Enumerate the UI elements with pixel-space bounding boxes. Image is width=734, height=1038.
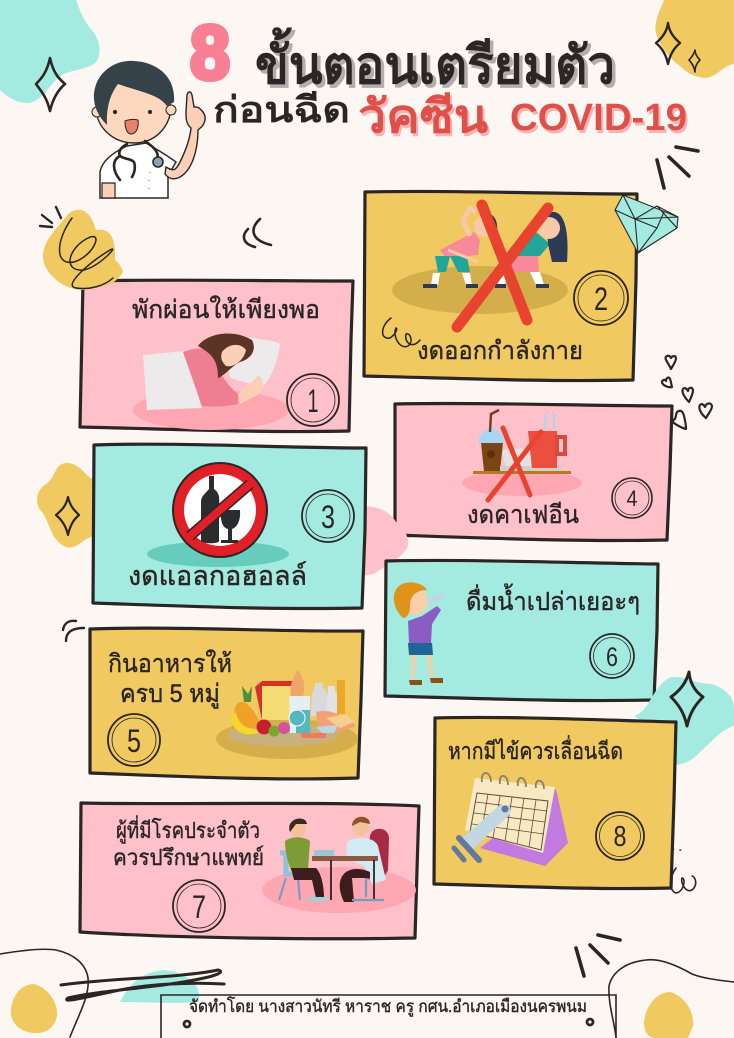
title xyxy=(190,11,689,145)
title vaccine shadow: วัคซีน xyxy=(360,93,491,145)
number 8: 8 xyxy=(190,11,230,96)
number 4: 4 xyxy=(626,486,638,511)
title line 1 shadow: ขั้นตอนเตรียมตัว xyxy=(258,30,618,98)
icon: sleeping woman xyxy=(133,333,289,430)
shadow ellipse xyxy=(147,541,289,567)
decoration: double crescent xyxy=(244,219,271,247)
decoration: teal blob with sparkle xyxy=(634,672,734,765)
illustration: two children stretching xyxy=(392,208,568,314)
heading 1: พักผ่อนให้เพียงพอ xyxy=(132,295,320,324)
decoration: hearts xyxy=(662,356,712,429)
heading 4: งดคาเฟอีน xyxy=(467,501,579,529)
number 7 xyxy=(173,880,225,932)
panel 5: food xyxy=(90,628,363,779)
title line 2: ก่อนฉีด xyxy=(213,89,350,130)
heading 8: หากมีไข้ควรเลื่อนฉีด xyxy=(448,735,623,764)
decoration: ticks near panel 5 xyxy=(63,621,84,641)
number 1 xyxy=(287,374,339,426)
decoration: yellow scribble blob xyxy=(40,207,123,290)
panel 7: consult a doctor xyxy=(80,803,419,939)
panel 6: drink water xyxy=(385,560,658,701)
decoration: bottom-right doodle xyxy=(609,960,734,1038)
title COVID shadow: COVID-19 xyxy=(512,100,689,142)
icon: no alcohol sign xyxy=(172,462,268,558)
number 8 badge xyxy=(596,812,644,860)
heading 7 line 1: ผู้ที่มีโรคประจำตัว xyxy=(116,815,260,844)
heading 2: งดออกกำลังกาย xyxy=(417,337,583,365)
footer left ornament xyxy=(184,1021,190,1027)
footer right ornament xyxy=(587,1019,593,1025)
number 4 xyxy=(612,478,652,518)
number 6 xyxy=(590,634,634,678)
decoration: yellow blob with sparkle xyxy=(37,463,95,547)
decoration: squiggle right of panel 8 xyxy=(671,849,696,893)
footer credit box xyxy=(161,995,616,1038)
panel 3: no alcohol xyxy=(93,444,366,609)
title vaccine: วัคซีน xyxy=(358,90,489,142)
title line 1: ขั้นตอนเตรียมตัว xyxy=(255,27,615,95)
decoration: pink blob xyxy=(360,506,408,576)
heading 5 line 2: ครบ 5 หมู่ xyxy=(120,680,220,709)
icon: doctor pointing up xyxy=(92,61,205,198)
decoration: top-right yellow blob with sparkles xyxy=(655,0,734,78)
panel 1: rest xyxy=(80,280,353,432)
heading 3: งดแอลกอฮอลล์ xyxy=(128,560,307,591)
panel 8: postpone if feverish xyxy=(434,717,676,889)
illustration: calendar and syringe xyxy=(454,773,568,866)
icon: diamond xyxy=(615,195,678,253)
number 1: 1 xyxy=(308,383,318,419)
icon: red cross xyxy=(488,428,541,500)
heading 6: ดื่มน้ำเปล่าเยอะๆ xyxy=(466,583,640,616)
number 5 xyxy=(108,714,160,766)
illustration: patient and doctor at desk xyxy=(262,817,416,913)
icon: red cross xyxy=(457,205,548,327)
panel 2: no exercise xyxy=(364,191,637,381)
heading 5 line 1: กินอาหารให้ xyxy=(108,649,232,678)
title COVID: COVID-19 xyxy=(510,97,687,139)
number 2: 2 xyxy=(594,281,608,317)
number 5: 5 xyxy=(127,723,141,759)
number 3 xyxy=(302,490,354,542)
decoration: top-left teal blob with sparkle xyxy=(0,0,100,111)
decoration: squiggle xyxy=(383,318,420,347)
number 7: 7 xyxy=(192,889,206,925)
number 6: 6 xyxy=(606,642,618,672)
illustration: coffee cups xyxy=(462,410,582,496)
number 3: 3 xyxy=(321,499,335,535)
heading 7 line 2: ควรปรึกษาแพทย์ xyxy=(113,845,264,870)
illustration: five food groups xyxy=(216,670,358,759)
decoration: bottom-left doodle xyxy=(0,949,224,1037)
panel 4: no caffeine xyxy=(395,403,672,541)
decoration: ticks bottom xyxy=(576,935,620,976)
number 8 badge: 8 xyxy=(614,821,626,853)
number 2 xyxy=(574,271,628,325)
illustration: boy drinking water xyxy=(394,582,446,685)
decoration: ticks top right xyxy=(657,147,698,188)
footer text: จัดทำโดย นางสาวนัทรี หาราช ครู กศน.อำเภอเมืองนครพนม xyxy=(189,996,587,1017)
